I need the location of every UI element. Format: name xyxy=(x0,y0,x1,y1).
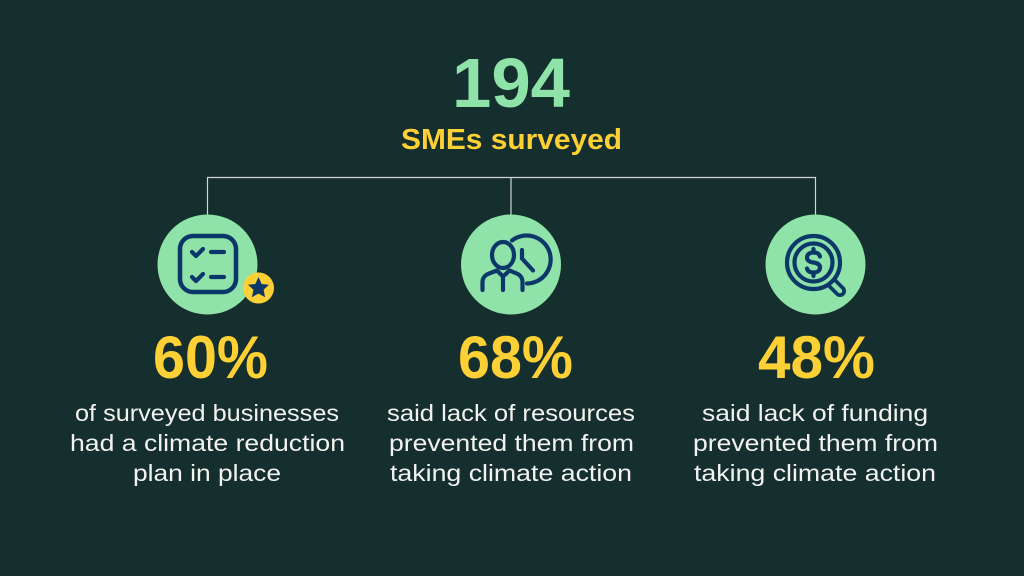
panel: lack of funding xyxy=(693,214,938,486)
subheading: SMEs surveyed xyxy=(401,124,622,156)
description: plan in place xyxy=(133,460,281,486)
description: taking climate action xyxy=(390,460,632,486)
description: had a climate reduction xyxy=(70,430,345,456)
icon: magnifier with dollar xyxy=(766,214,866,314)
description xyxy=(387,400,635,486)
stat 60%: 60% xyxy=(153,324,268,391)
panel: climate reduction plan xyxy=(70,214,345,486)
description: taking climate action xyxy=(694,460,936,486)
description: prevented them from xyxy=(693,430,938,456)
description: of surveyed businesses xyxy=(75,400,339,426)
description: prevented them from xyxy=(389,430,634,456)
icon: person and clock xyxy=(461,214,561,314)
stat 68%: 68% xyxy=(458,324,573,391)
description: said lack of resources xyxy=(387,400,635,426)
panel: lack of resources xyxy=(387,214,635,486)
big number 194: 194 xyxy=(452,44,570,122)
description: said lack of funding xyxy=(702,400,928,426)
description xyxy=(693,400,938,486)
description xyxy=(70,400,345,486)
icon: checklist with star badge xyxy=(158,214,274,314)
heading: total surveyed xyxy=(401,44,622,156)
connector lines xyxy=(208,178,816,215)
stat 48%: 48% xyxy=(758,324,875,391)
